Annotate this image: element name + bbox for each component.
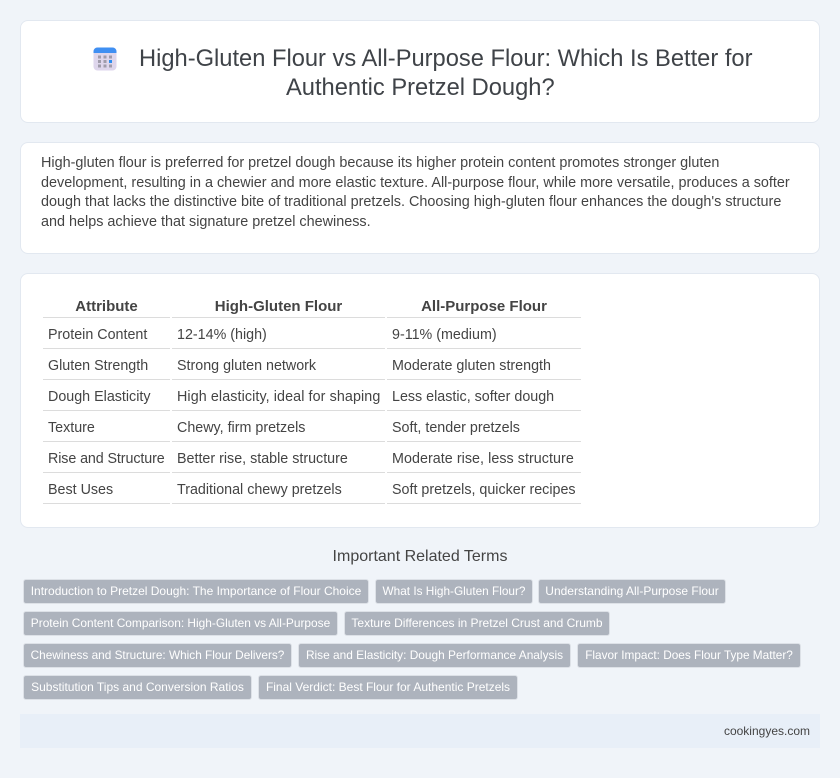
panel: introduction xyxy=(20,142,820,254)
footer credit: cookingyes.com xyxy=(724,724,810,738)
related term tags: What Is High-Gluten Flour? xyxy=(383,584,525,598)
heading: important related terms: Important Related Terms xyxy=(333,548,507,565)
table header: Attribute xyxy=(75,298,138,315)
panel: comparison table: 12-14% (high) xyxy=(177,327,267,343)
panel: comparison table: Chewy, firm pretzels xyxy=(177,420,305,436)
related term tags: Rise and Elasticity: Dough Performance Analysis xyxy=(306,648,563,662)
panel: comparison table: Moderate rise, less structure xyxy=(392,451,574,467)
text block: introduction: and helps achieve that signature pretzel chewiness. xyxy=(41,214,371,230)
row: best uses: Best Uses xyxy=(48,482,113,498)
row: rise and structure: Rise and Structure xyxy=(48,451,165,467)
panel: title header xyxy=(20,20,820,123)
text block: introduction: High-gluten flour is preferred for pretzel dough because its higher protein content promotes stronger gluten xyxy=(41,155,719,171)
related term tags: Substitution Tips and Conversion Ratios xyxy=(31,680,244,694)
related term tags: Chewiness and Structure: Which Flour Delivers? xyxy=(31,648,284,662)
panel: comparison table: Better rise, stable structure xyxy=(177,451,348,467)
text block: introduction xyxy=(41,155,790,230)
panel: comparison table: 9-11% (medium) xyxy=(392,327,497,343)
related term tags: Protein Content Comparison: High-Gluten vs All-Purpose xyxy=(31,616,330,630)
row: texture: Texture xyxy=(48,420,95,436)
row: gluten strength: Gluten Strength xyxy=(48,358,148,374)
related term tags: Texture Differences in Pretzel Crust and Crumb xyxy=(351,616,603,630)
panel: comparison table: Soft, tender pretzels xyxy=(392,420,520,436)
panel: comparison table: High-Gluten Flour xyxy=(215,298,342,315)
related term tags: Flavor Impact: Does Flour Type Matter? xyxy=(585,648,793,662)
related term tags: Introduction to Pretzel Dough: The Importance of Flour Choice xyxy=(31,584,361,598)
title: High-Gluten Flour vs All-Purpose Flour: Which Is Better for xyxy=(139,46,752,72)
title xyxy=(139,46,752,101)
panel: comparison table: Soft pretzels, quicker recipes xyxy=(392,482,576,498)
panel: comparison table: Traditional chewy pretzels xyxy=(177,482,342,498)
title: Authentic Pretzel Dough? xyxy=(286,75,555,101)
panel: comparison table: High elasticity, ideal for shaping xyxy=(177,389,380,405)
icon: calendar xyxy=(94,48,116,70)
panel: comparison table: Moderate gluten strength xyxy=(392,358,551,374)
row: dough elasticity: Dough Elasticity xyxy=(48,389,151,405)
related term tags xyxy=(23,579,801,700)
related term tags: Understanding All-Purpose Flour xyxy=(545,584,719,598)
panel: comparison table xyxy=(20,273,820,528)
panel: comparison table: Less elastic, softer dough xyxy=(392,389,554,405)
row: protein content: Protein Content xyxy=(48,327,147,343)
panel: comparison table: Strong gluten network xyxy=(177,358,316,374)
text block: introduction: development, resulting in a chewier and more elastic texture. All-purpose flour, while more versatile, produces a softer xyxy=(41,175,790,191)
panel: comparison table: All-Purpose Flour xyxy=(421,298,547,315)
footer xyxy=(20,714,820,748)
text block: introduction: dough that lacks the distinctive bite of traditional pretzels. Choosing high-gluten flour enhances the dough's structure xyxy=(41,194,781,210)
related term tags: Final Verdict: Best Flour for Authentic Pretzels xyxy=(266,680,510,694)
